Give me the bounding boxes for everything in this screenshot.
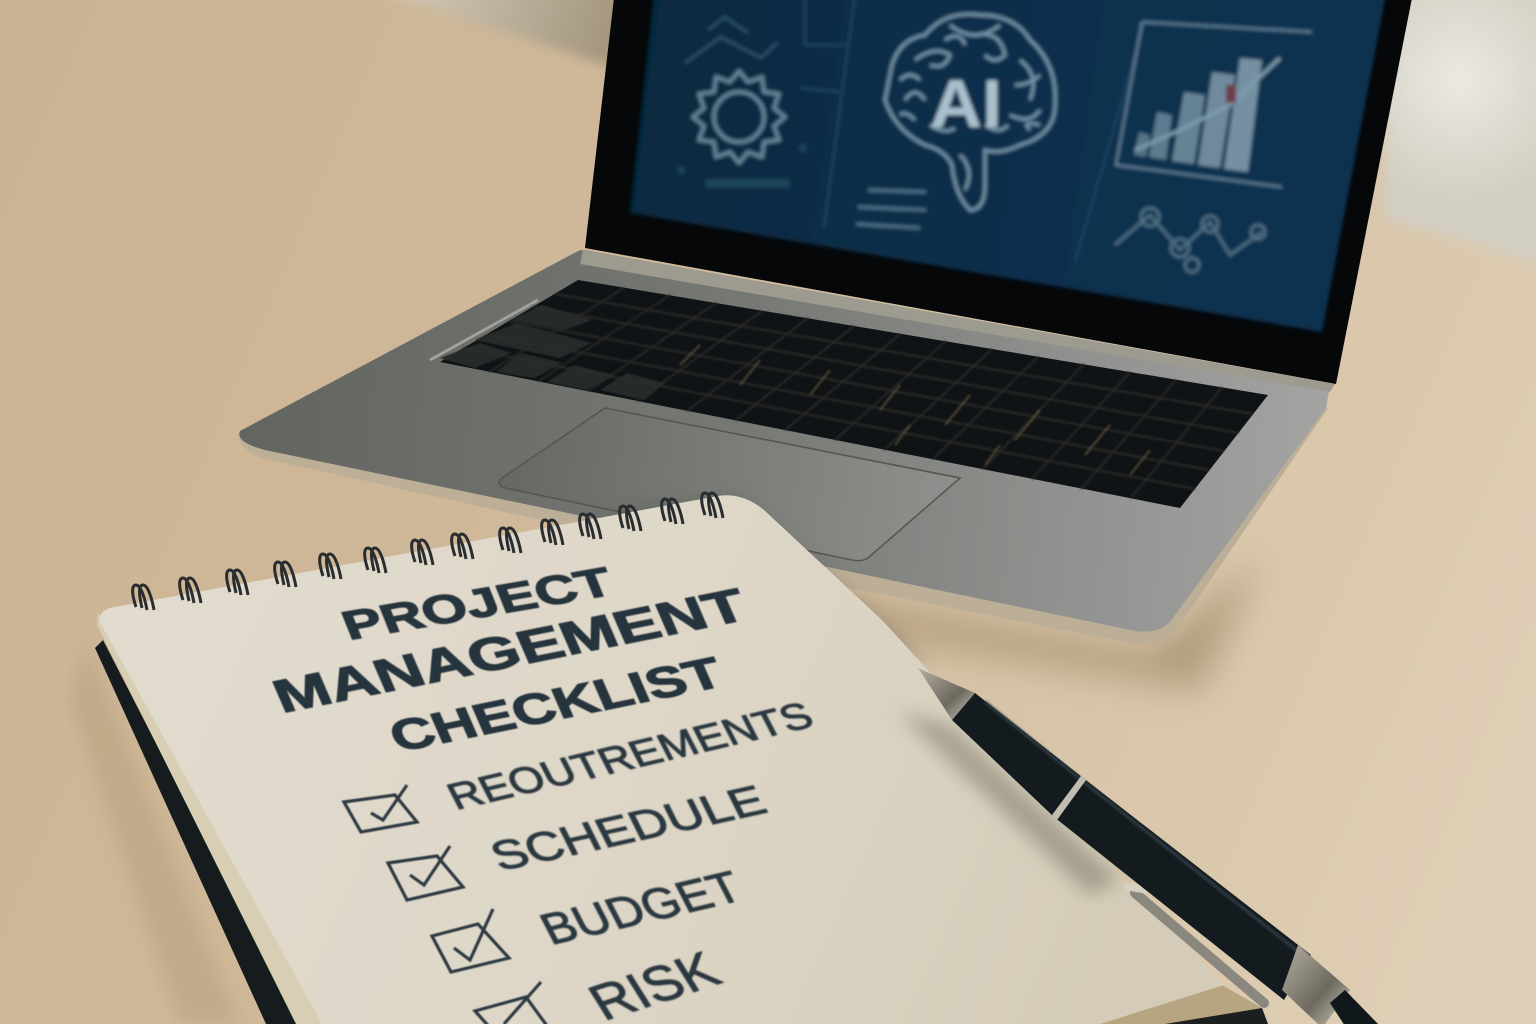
icon: trend squiggle bbox=[685, 17, 777, 63]
keyboard edge highlight bbox=[430, 300, 538, 360]
chart: rising bars bbox=[1116, 22, 1312, 187]
checkboxes bbox=[344, 785, 550, 1024]
icon: network line bbox=[1115, 208, 1265, 272]
icon: text lines bbox=[856, 190, 926, 228]
trackpad bbox=[499, 408, 960, 561]
laptop bbox=[238, 0, 1412, 690]
notebook page edges bbox=[97, 612, 328, 1024]
background wall bbox=[345, 0, 1536, 268]
laptop base front edge bbox=[238, 300, 1328, 644]
pen shadow bbox=[898, 712, 1120, 895]
notebook bbox=[70, 493, 1380, 1024]
laptop shadow bbox=[780, 560, 1260, 690]
spiral binding bbox=[133, 493, 723, 610]
notebook page bbox=[100, 495, 1224, 1024]
checklist items bbox=[440, 695, 820, 1024]
pen body bbox=[952, 693, 1311, 1000]
heading: Project Management Checklist: MANAGEMENT bbox=[265, 580, 755, 723]
pen tip bbox=[918, 668, 975, 720]
pen tail bbox=[1330, 990, 1380, 1024]
laptop screen bezel bbox=[585, 0, 1412, 384]
laptop lid hinge bbox=[580, 250, 1335, 392]
notebook shadow bbox=[70, 640, 240, 1024]
notebook lower right thickness bbox=[1100, 985, 1262, 1024]
laptop base deck bbox=[239, 250, 1330, 632]
keyboard grid bbox=[463, 294, 1253, 489]
heading: Project Management Checklist bbox=[265, 558, 755, 761]
icon: brain bbox=[885, 14, 1055, 210]
checklist items: SCHEDULE bbox=[483, 777, 774, 880]
heading: Project Management Checklist: CHECKLIST bbox=[382, 649, 730, 761]
laptop display bbox=[630, 0, 1386, 332]
pen bbox=[898, 668, 1380, 1024]
pen clip bbox=[1128, 887, 1264, 1003]
faint dots and caption bbox=[677, 144, 807, 188]
icon: gear bbox=[693, 71, 785, 163]
heading: Project Management Checklist: PROJECT bbox=[335, 558, 619, 648]
notebook back cover bbox=[95, 640, 300, 1024]
pen end bbox=[1282, 945, 1350, 1024]
keyboard warm glints bbox=[680, 345, 1150, 475]
pen ring bbox=[1052, 776, 1086, 820]
checklist items: REOUTREMENTS bbox=[440, 695, 820, 818]
keyboard left keys bbox=[440, 305, 665, 400]
keyboard bbox=[430, 280, 1268, 508]
shadow on laptop bbox=[580, 498, 930, 665]
checklist items: BUDGET bbox=[532, 862, 750, 954]
label: AI: AI bbox=[930, 66, 1002, 142]
